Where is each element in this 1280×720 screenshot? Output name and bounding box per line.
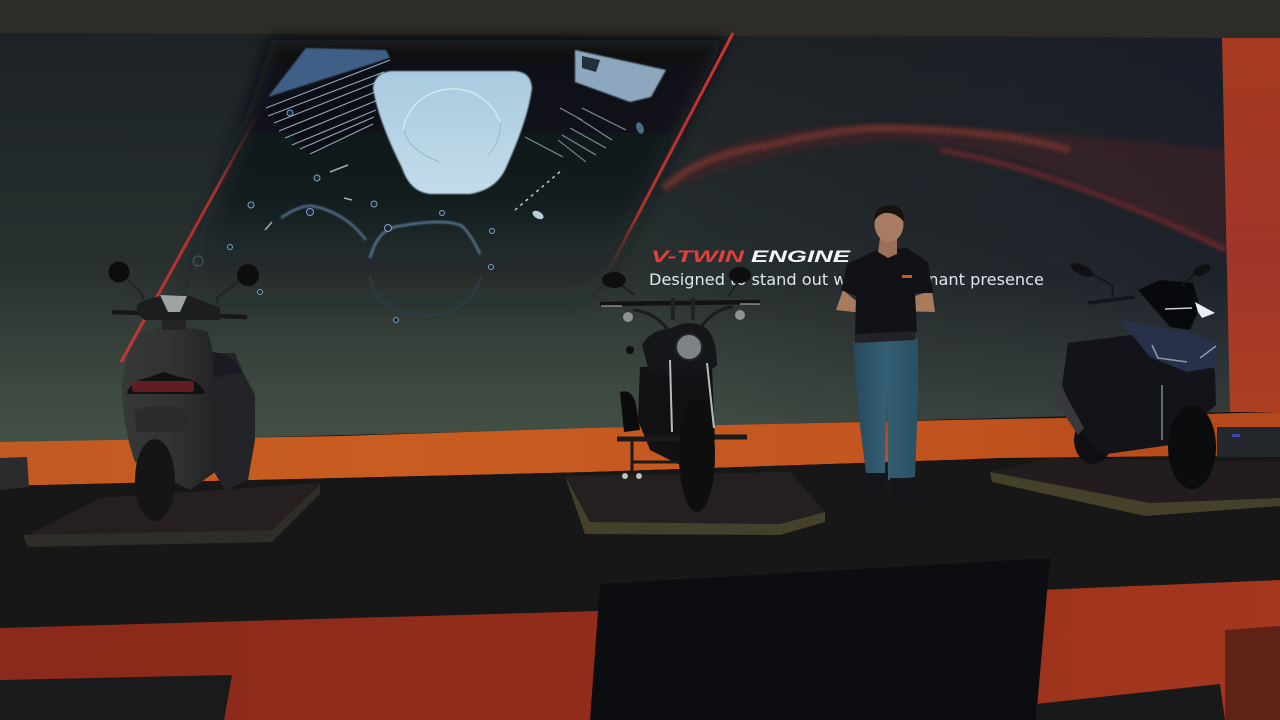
engine cylinder right — [515, 50, 666, 221]
scooter front tyre — [135, 439, 175, 521]
arms and hands — [836, 290, 935, 315]
scooter mirrors and bar — [1090, 273, 1195, 297]
red particle wave — [664, 124, 1226, 252]
handlebar — [600, 302, 760, 304]
scooter rear storage and seat — [210, 353, 255, 490]
engine cylinder left — [266, 48, 390, 155]
engine block — [638, 367, 715, 470]
centre plinth — [565, 472, 825, 535]
right maxi scooter — [1053, 260, 1217, 489]
equipment box right — [1217, 427, 1280, 457]
scooter fairing — [1120, 320, 1217, 372]
left scooter — [108, 262, 259, 521]
LED screen — [0, 33, 1230, 444]
sub-headline: Designed to stand out with a dominant presence — [649, 270, 1044, 289]
shoes — [860, 473, 884, 497]
stand — [632, 438, 680, 472]
scooter exhaust — [1053, 392, 1084, 435]
forks — [670, 360, 714, 432]
crankcase arcs and bolts — [193, 110, 494, 322]
presenter — [836, 205, 935, 500]
centre cruiser motorcycle — [600, 267, 760, 512]
scooter leg shield — [122, 326, 218, 490]
tank and nacelle — [642, 323, 717, 375]
scooter handlebar — [112, 312, 247, 317]
air cleaner cover — [373, 71, 532, 194]
LED screen: ENGINE — [751, 247, 851, 266]
scooter rear tyre — [1074, 416, 1112, 464]
scooter front tyre — [1168, 405, 1216, 489]
lower stage red front — [0, 580, 1280, 720]
foot pegs — [617, 437, 747, 439]
headline: V-TWIN — [651, 247, 745, 266]
equipment box left — [0, 457, 29, 490]
ceiling band — [0, 0, 1280, 38]
right plinth — [990, 458, 1280, 516]
headlight — [676, 334, 702, 360]
reflected arrow — [1195, 302, 1215, 318]
left plinth — [23, 483, 320, 547]
scooter lamp cluster — [127, 372, 205, 394]
engine image panel — [170, 40, 725, 340]
scooter seat and body — [1062, 335, 1216, 455]
foreground right box — [1225, 626, 1280, 720]
belt — [855, 331, 915, 343]
polo shirt — [841, 248, 933, 335]
red slanted lines — [121, 33, 733, 362]
scooter fender — [135, 406, 190, 432]
scooter headlights — [1152, 345, 1216, 362]
exhaust — [620, 391, 640, 432]
neck and head — [878, 238, 897, 258]
foreground left box — [0, 675, 232, 720]
stage floor — [0, 455, 1280, 628]
front tyre — [679, 398, 715, 512]
foreground monitor silhouette — [590, 558, 1050, 720]
right red side panel — [1222, 38, 1280, 412]
jeans — [853, 338, 918, 480]
orange stage fascia — [0, 412, 1280, 486]
scooter windshield — [1138, 280, 1200, 330]
